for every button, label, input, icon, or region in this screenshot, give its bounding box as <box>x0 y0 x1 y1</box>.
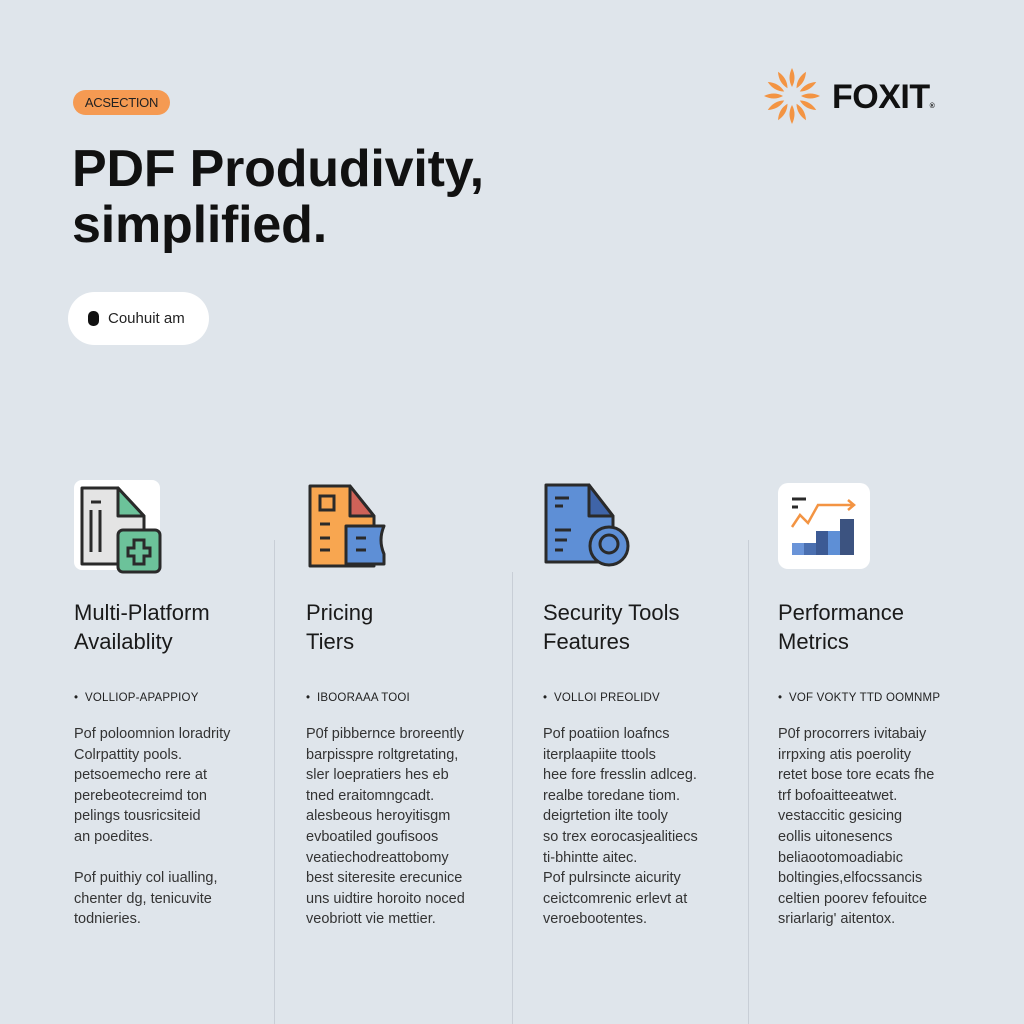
column 4: P0f procorrers ivitabaiy <box>778 726 926 742</box>
column 4: eollis uitonesencs <box>778 829 892 845</box>
column 4: beliaootomoadiabic <box>778 850 903 866</box>
body text: Colrpattity pools. <box>74 747 182 763</box>
column 1 <box>74 480 230 927</box>
title: simplified. <box>72 196 327 254</box>
heading: Multi-Platform <box>74 600 210 625</box>
logo: FOXIT® <box>832 78 934 116</box>
column 4: Metrics <box>778 629 849 654</box>
icon: security document <box>544 483 630 566</box>
body text: an poedites. <box>74 829 153 845</box>
column 2: veobriott vie mettier. <box>306 911 436 927</box>
column 2: Tiers <box>306 629 354 654</box>
body text: pelings tousricsiteid <box>74 808 201 824</box>
body text: petsoemecho rere at <box>74 767 207 783</box>
column 3: ceictcomrenic erlevt at <box>543 891 687 907</box>
column 4: trf bofoaitteeatwet. <box>778 788 897 804</box>
column 3: Pof pulrsincte aicurity <box>543 870 681 886</box>
column 2: tned eraitomngcadt. <box>306 788 434 804</box>
column 2: best siteresite erecunice <box>306 870 462 886</box>
column 4: celtien poorev fefouitce <box>778 891 927 907</box>
column 4: vestaccitic gesicing <box>778 808 902 824</box>
button: Couhuit am <box>108 310 185 327</box>
column 2: alesbeous heroyitisgm <box>306 808 450 824</box>
dividers <box>274 540 275 1024</box>
column 4: irrpxing atis poerolity <box>778 747 911 763</box>
body text: todnieries. <box>74 911 141 927</box>
tag pill <box>73 90 170 115</box>
column 4: boltingies,elfocssancis <box>778 870 922 886</box>
column 4: Performance <box>778 600 904 625</box>
column 3: ti-bhintte aitec. <box>543 850 637 866</box>
column 3: veroebootentes. <box>543 911 647 927</box>
column 3: iterplaapiite ttools <box>543 747 656 763</box>
column 4: retet bose tore ecats fhe <box>778 767 934 783</box>
column 2: • IBOORAAA TOOI <box>306 692 410 704</box>
column 4: • VOF VOKTY TTD OOMNMP <box>778 692 940 704</box>
title: PDF Produdivity, <box>72 140 484 198</box>
column 2: uns uidtire horoito noced <box>306 891 465 907</box>
heading <box>74 600 210 654</box>
column 3: • VOLLOI PREOLIDV <box>543 692 660 704</box>
column 3: deigrtetion ilte tooly <box>543 808 668 824</box>
column 2 <box>306 484 465 927</box>
body text: perebeotecreimd ton <box>74 788 207 804</box>
column 3: Security Tools <box>543 600 680 625</box>
column 3: Features <box>543 629 630 654</box>
column 4 <box>778 483 940 927</box>
icon: pricing document <box>308 484 386 568</box>
column 2: veatiechodreattobomy <box>306 850 449 866</box>
column 3: so trex eorocasjealitiecs <box>543 829 698 845</box>
bullet: • VOLLIOP-APAPPIOY <box>74 692 199 704</box>
icon: document plus <box>74 480 162 574</box>
column 3: realbe toredane tiom. <box>543 788 680 804</box>
column 2: sler loepratiers hes eb <box>306 767 449 783</box>
column 2: Pricing <box>306 600 373 625</box>
body text: chenter dg, tenicuvite <box>74 891 212 907</box>
column 3 <box>543 483 698 927</box>
logo <box>764 68 935 124</box>
title <box>72 140 484 254</box>
tag pill: ACSECTION <box>85 95 158 110</box>
column 2: P0f pibbernce broreently <box>306 726 464 742</box>
column 2: evboatiled goufisoos <box>306 829 438 845</box>
column 4: sriarlarig' aitentox. <box>778 911 895 927</box>
column 3: Pof poatiion loafncs <box>543 726 670 742</box>
button <box>68 292 209 345</box>
column 2: barpisspre roltgretating, <box>306 747 458 763</box>
body text: Pof poloomnion loradrity <box>74 726 230 742</box>
body text: Pof puithiy col iualling, <box>74 870 217 886</box>
icon: performance chart <box>778 483 870 569</box>
body text <box>74 726 230 927</box>
column 3: hee fore fresslin adlceg. <box>543 767 697 783</box>
heading: Availablity <box>74 629 173 654</box>
